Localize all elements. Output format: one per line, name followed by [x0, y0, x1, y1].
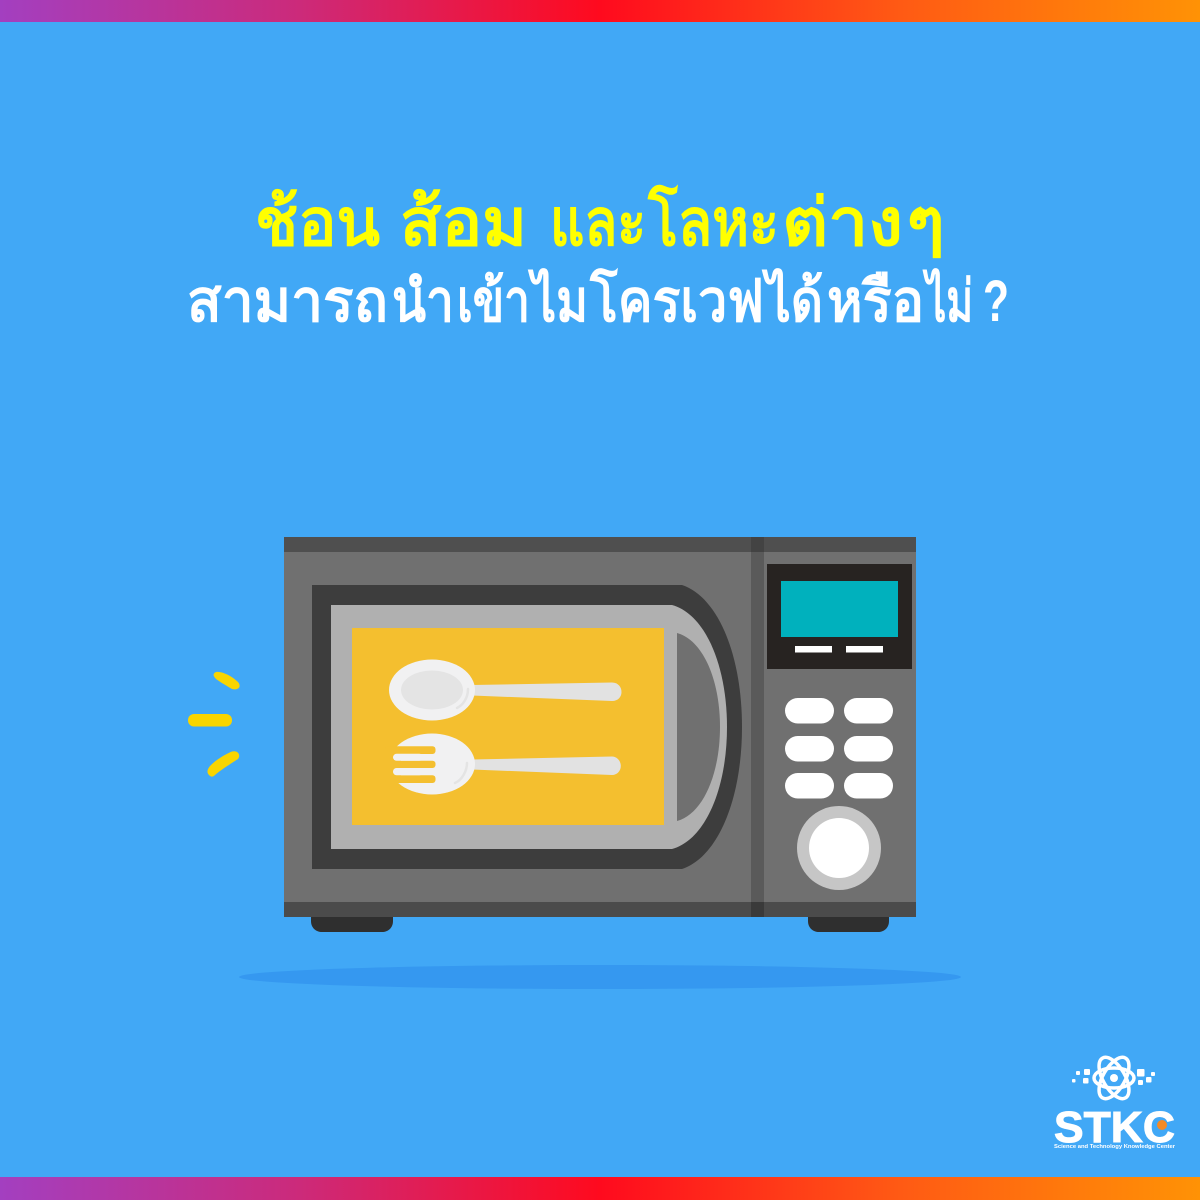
feet [311, 917, 889, 932]
title line 1: ๆ [906, 185, 945, 259]
title line 2: ไม่ [922, 268, 973, 334]
title line 1 [255, 183, 945, 259]
fork [385, 734, 621, 794]
logo dot [1157, 1120, 1167, 1130]
title line 1: โลหะ [647, 183, 779, 259]
title line 2: โครเวฟ [589, 266, 764, 334]
title line 2: ได้ [761, 268, 823, 334]
title line 1: และ [550, 185, 646, 259]
spoon [389, 660, 622, 720]
logo atom icon [1072, 1053, 1155, 1103]
title line 2: ? [983, 269, 1009, 334]
mark bottom [207, 751, 239, 777]
bottom band [284, 902, 916, 917]
title line 1: ต่าง [782, 185, 903, 259]
logo wordmark: STKC [1054, 1103, 1175, 1152]
door frame [312, 585, 742, 869]
screen [781, 581, 898, 637]
title line 2: ไม [527, 268, 588, 334]
fork head [389, 734, 475, 794]
buttons [785, 698, 893, 798]
microwave [284, 537, 916, 932]
spoon bowl [389, 660, 475, 720]
vibration marks [188, 672, 240, 777]
spoon handle [472, 682, 622, 701]
door inner [331, 605, 727, 849]
fork handle [472, 756, 621, 775]
title line 2: เข้า [457, 269, 530, 334]
window [352, 628, 664, 825]
logo: STKC [1054, 1053, 1175, 1152]
mark middle [188, 714, 232, 726]
floor shadow [239, 965, 961, 989]
top band [284, 537, 916, 552]
body [284, 537, 916, 917]
top gradient bar [0, 0, 1200, 22]
door handle recess [677, 633, 720, 821]
display panel [767, 564, 912, 669]
divider strip [751, 537, 764, 917]
bottom gradient bar [0, 1177, 1200, 1200]
title line 2: นำ [392, 269, 454, 334]
mark top [214, 672, 240, 689]
title line 2 [187, 266, 1009, 334]
display indicators [795, 646, 832, 652]
title line 2: หรือ [827, 269, 924, 334]
title line 2: สามารถ [187, 269, 388, 334]
title line 1: ส้อม [400, 185, 527, 259]
title [187, 183, 1009, 334]
title line 1: ช้อน [255, 185, 380, 259]
dial [797, 806, 881, 890]
logo tagline: Science and Technology Knowledge Center [1054, 1144, 1175, 1150]
